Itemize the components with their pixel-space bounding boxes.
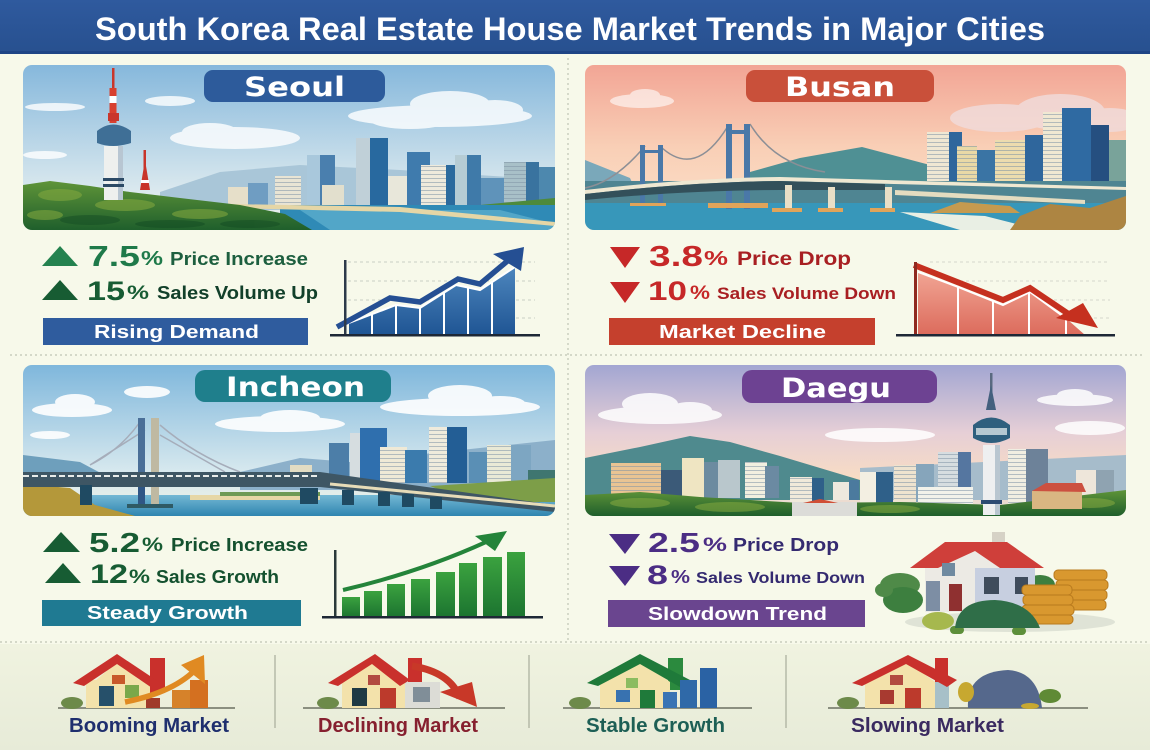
- stat: 8% sales volume down: Sales Volume Down: [696, 570, 865, 587]
- stat: 8% sales volume down: [609, 560, 865, 590]
- city name pill: Incheon: [195, 370, 391, 403]
- stat: 12% sales growth: %: [129, 567, 150, 588]
- stat: 10% sales volume down: 10: [648, 276, 687, 306]
- title banner: [0, 0, 1150, 54]
- panel: Busan: [585, 65, 1140, 345]
- small house with red roof: [1032, 483, 1086, 509]
- legend item: Stable Growth: [563, 654, 752, 737]
- stat: 3.8% price drop: [610, 241, 851, 273]
- stat: 10% sales volume down: Sales Volume Down: [717, 284, 896, 303]
- city name pill: Incheon: Incheon: [226, 372, 365, 403]
- suspension bridge: [585, 124, 1126, 212]
- stat: 3.8% price drop: Price Drop: [737, 249, 851, 270]
- status banner: Market Decline: [609, 318, 875, 345]
- status banner: Slowdown Trend: Slowdown Trend: [648, 603, 827, 624]
- stat: 12% sales growth: 12: [90, 559, 128, 589]
- stat: 2.5% price drop: [609, 527, 839, 558]
- stat: 3.8% price drop: %: [704, 248, 728, 270]
- stat: 15% sales volume up: [42, 276, 318, 306]
- stat: 7.5% price increase: %: [141, 248, 163, 270]
- line-area chart: Busan falling: [896, 262, 1115, 336]
- city name pill: Seoul: Seoul: [244, 72, 345, 103]
- stat: 10% sales volume down: %: [690, 283, 710, 304]
- Daegu tower: [973, 373, 1010, 515]
- city name pill: Busan: [746, 70, 934, 103]
- legend item: Booming Market: [58, 654, 235, 737]
- stat: 8% sales volume down: 8: [647, 560, 668, 590]
- city illustration: Daegu skyline and tower: [585, 365, 1126, 516]
- label: Slowing Market: [851, 715, 1004, 737]
- label: Stable Growth: [586, 715, 725, 737]
- stat: 12% sales growth: [45, 559, 279, 589]
- status banner: Steady Growth: [42, 600, 301, 626]
- stat: 15% sales volume up: Sales Volume Up: [157, 283, 318, 303]
- stat: 5.2% price increase: 5.2: [89, 527, 140, 558]
- status banner: Market Decline: Market Decline: [659, 321, 826, 342]
- panel: Daegu: [585, 365, 1126, 635]
- stat: 12% sales growth: Sales Growth: [156, 567, 279, 587]
- stat: 7.5% price increase: 7.5: [88, 241, 140, 273]
- stat: 7.5% price increase: Price Increase: [170, 249, 308, 269]
- stat: 2.5% price drop: 2.5: [648, 527, 700, 558]
- status banner: Rising Demand: [43, 318, 308, 345]
- small red tower: [140, 150, 150, 190]
- stat: 2.5% price drop: Price Drop: [733, 535, 839, 555]
- label: Booming Market: [69, 715, 229, 737]
- bar chart: Incheon growth: [322, 531, 543, 618]
- status banner: Slowdown Trend: [608, 600, 865, 627]
- city name pill: Daegu: Daegu: [781, 373, 891, 404]
- stat: 15% sales volume up: %: [127, 283, 149, 304]
- city illustration: Busan bridge and skyline: [585, 65, 1140, 230]
- stat: 5.2% price increase: Price Increase: [171, 535, 308, 555]
- stat: 3.8% price drop: 3.8: [649, 241, 703, 273]
- city illustration: Seoul skyline and tower: [23, 65, 555, 230]
- status banner: Steady Growth: Steady Growth: [87, 602, 248, 623]
- city name pill: Seoul: [204, 70, 385, 103]
- panel: Incheon: [23, 365, 555, 626]
- suspension bridge: [23, 418, 555, 512]
- stat: 2.5% price drop: %: [703, 535, 727, 556]
- panel: Seoul: [23, 65, 555, 345]
- panel: market legend strip: [0, 644, 1150, 750]
- city name pill: Daegu: [742, 370, 937, 404]
- line-area chart: Seoul rising: [330, 247, 540, 336]
- stat: 8% sales volume down: %: [671, 567, 690, 587]
- legend item: Slowing Market: [828, 655, 1088, 737]
- illustration: house, turtle and coins: [875, 532, 1115, 635]
- stat: 7.5% price increase: [42, 241, 308, 273]
- label: Declining Market: [318, 715, 478, 737]
- stat: 5.2% price increase: [43, 527, 308, 558]
- N Seoul Tower: [97, 68, 131, 200]
- stat: 5.2% price increase: %: [142, 535, 163, 556]
- legend item: Declining Market: [303, 654, 505, 737]
- status banner: Rising Demand: Rising Demand: [94, 321, 259, 342]
- stat: 15% sales volume up: 15: [87, 276, 125, 306]
- city name pill: Busan: Busan: [785, 72, 895, 103]
- city illustration: Incheon bridge and skyline: [23, 365, 555, 516]
- stat: 10% sales volume down: [610, 276, 896, 306]
- title: South Korea Real Estate House Market Trends in Major Cities: [95, 11, 1045, 47]
